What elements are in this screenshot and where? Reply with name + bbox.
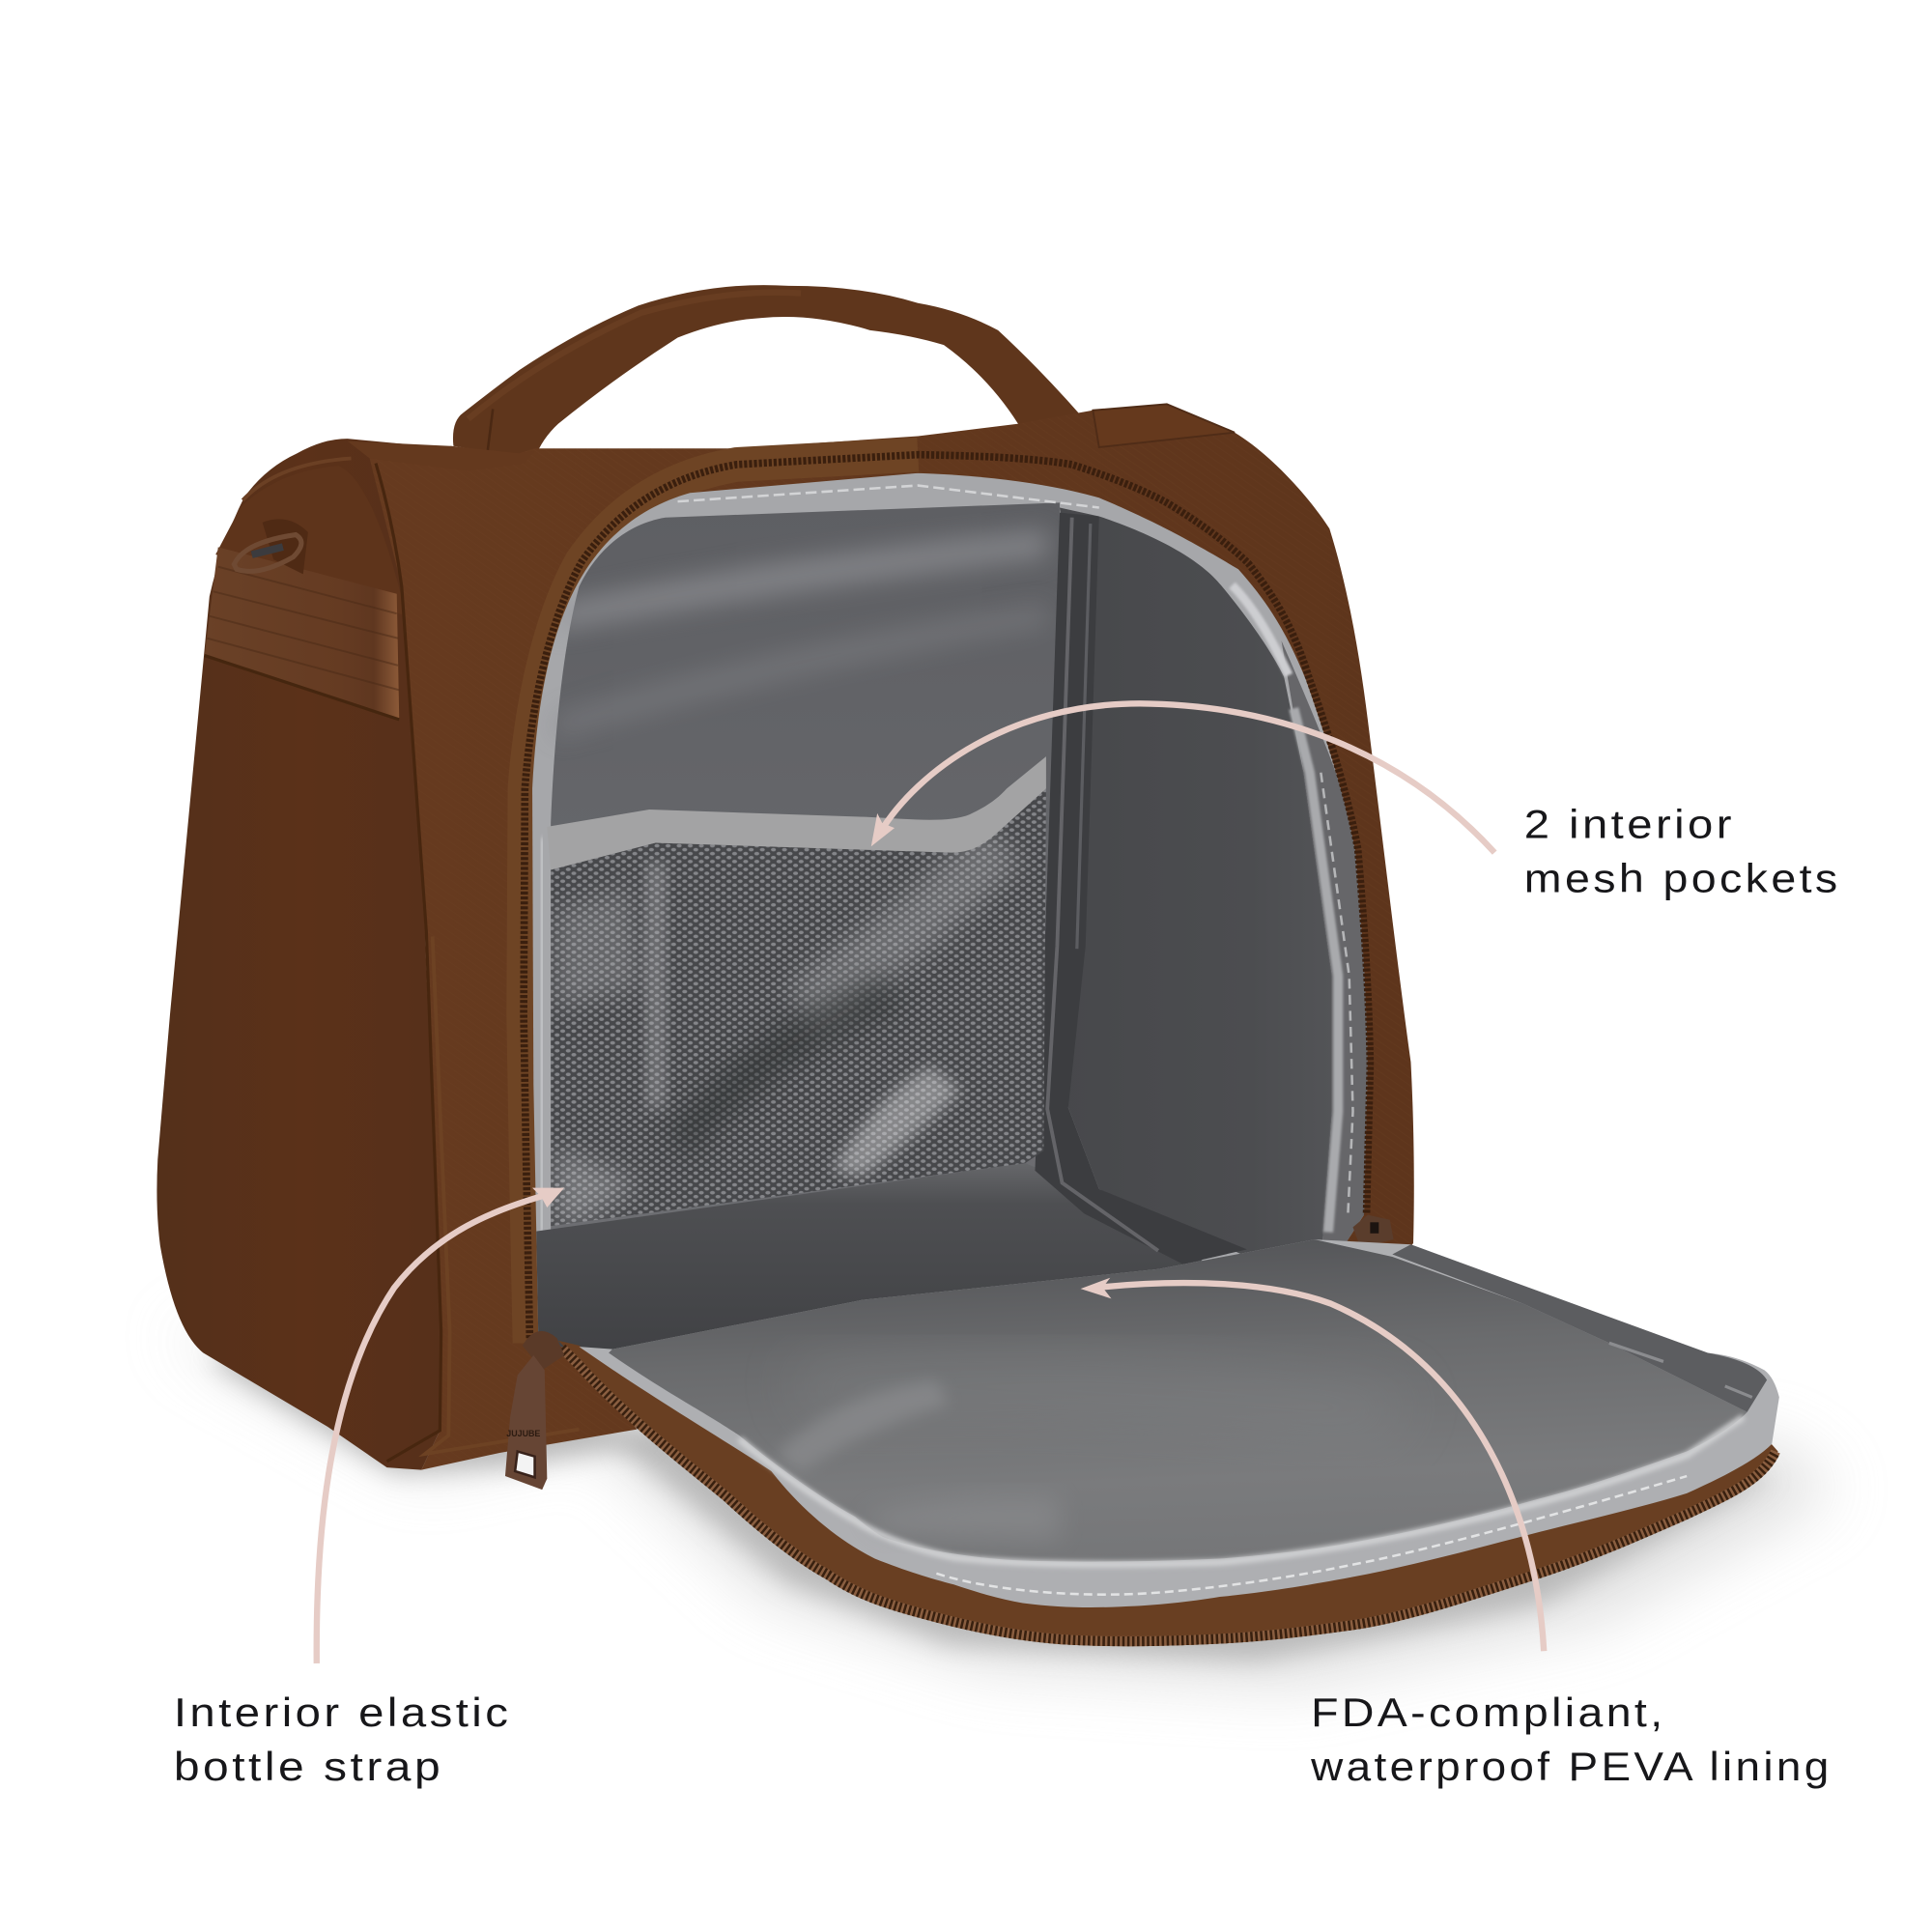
label: PEVA lining: FDA-compliant,	[1311, 1690, 1665, 1735]
lid stitching	[739, 1343, 1752, 1595]
label: PEVA lining: waterproof PEVA lining	[1310, 1744, 1833, 1789]
arrow: PEVA lining	[1081, 1278, 1544, 1651]
lid zipper	[558, 1341, 1778, 1646]
bag	[156, 285, 1779, 1646]
open lid	[558, 1239, 1779, 1646]
arrow: interior mesh pockets	[871, 703, 1494, 853]
label: mesh pockets: mesh pockets	[1524, 855, 1841, 900]
lid rim	[579, 1239, 1779, 1607]
lid dark band	[1392, 1244, 1767, 1412]
floor	[536, 1165, 1202, 1350]
right rim shading	[1282, 640, 1370, 1257]
zipper tape	[524, 455, 918, 1343]
label: mesh pockets	[1524, 801, 1841, 900]
pocket band	[547, 756, 1046, 870]
label: bottle strap: Interior elastic	[174, 1690, 511, 1735]
D-ring	[234, 519, 308, 574]
zipper slider right	[1353, 1215, 1394, 1247]
handle tab left	[348, 441, 535, 470]
silver lining	[524, 469, 1374, 1355]
back wall	[551, 502, 1060, 1233]
front frame	[370, 404, 1414, 1470]
lid highlights	[777, 1359, 1417, 1540]
lid panel	[609, 1239, 1747, 1562]
label: bottle strap	[174, 1690, 511, 1789]
silver highlights	[541, 585, 1353, 1233]
floor shadow	[166, 1331, 1836, 1686]
side panel	[156, 439, 451, 1470]
top stitching	[678, 486, 1099, 508]
label: bottle strap: bottle strap	[174, 1744, 443, 1789]
zipper pull	[505, 1331, 564, 1490]
handle	[453, 285, 1096, 458]
zipper teeth	[524, 455, 1370, 1343]
label: PEVA lining	[1310, 1690, 1833, 1789]
arrow: bottle strap	[317, 1188, 564, 1663]
zipper pull: JUJUBE	[506, 1429, 540, 1438]
corner seam	[1035, 513, 1247, 1264]
interior	[524, 469, 1374, 1368]
webbing strap	[205, 547, 399, 720]
label: mesh pockets: 2 interior	[1524, 801, 1735, 846]
mesh pocket	[542, 788, 1054, 1233]
right wall	[1060, 508, 1332, 1257]
handle tab right	[1093, 404, 1235, 447]
